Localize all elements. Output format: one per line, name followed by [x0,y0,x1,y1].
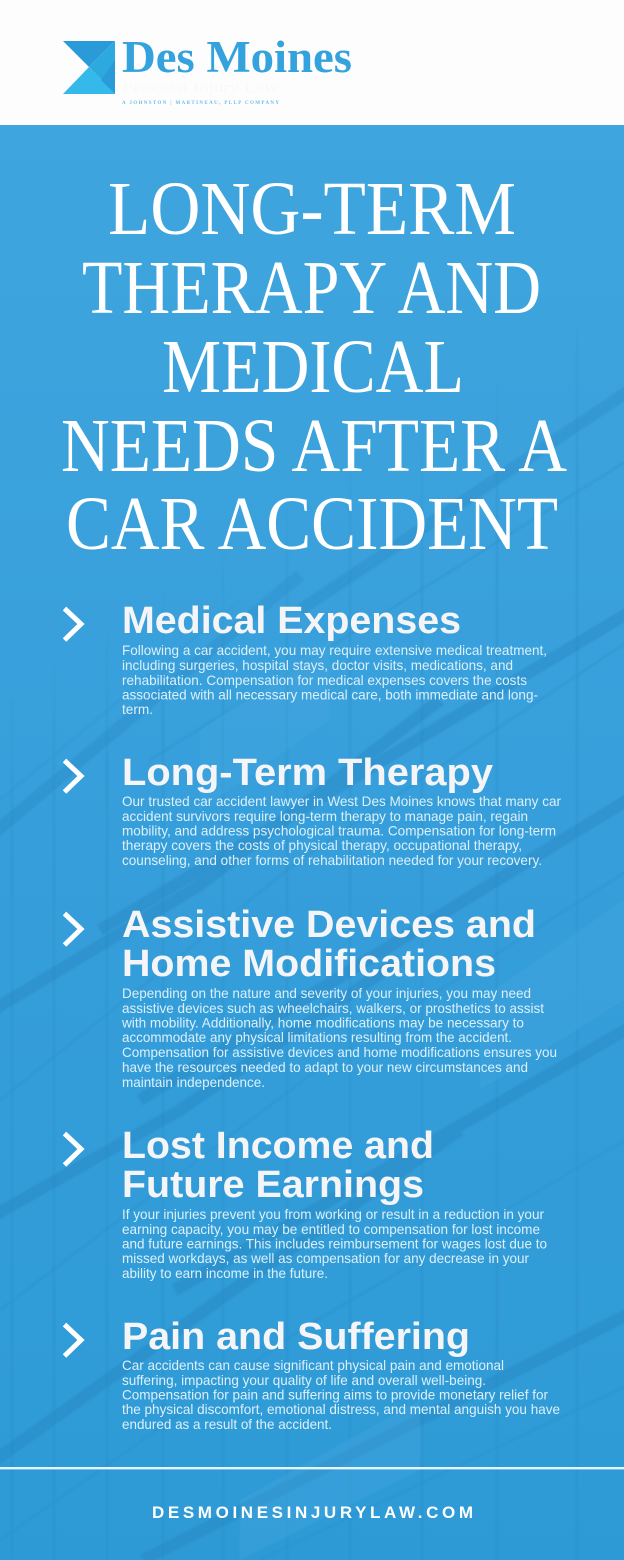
body: assistive devices: have the resources needed to adapt to your new circumstances and [122,1059,528,1075]
heading: assistive devices: Home Modifications [122,943,496,985]
body: assistive devices [121,985,557,1090]
title: CAR ACCIDENT [66,482,558,566]
body: lost income: and future earnings. This includes reimbursement for wages lost due to [122,1236,547,1252]
body: assistive devices: Depending on the nature and severity of your injuries, you may need [122,985,531,1001]
icon: chevron [64,608,81,640]
body: long-term therapy: Our trusted car accident lawyer in West Des Moines knows that many car [122,793,561,809]
heading: lost income: Future Earnings [122,1164,424,1206]
logo wordmark: Des Moines [122,32,352,82]
body: lost income: ability to earn income in the future. [122,1265,328,1281]
icon: chevron [64,760,81,792]
logo faint subtitle: Personal Injury Law [122,80,278,96]
body: medical expenses: including surgeries, hospital stays, doctor visits, medications, and [122,657,513,673]
icon: chevron [64,1324,81,1356]
body: medical expenses [122,642,547,717]
body: medical expenses: rehabilitation. Compensation for medical expenses covers the costs [122,672,527,688]
title: LONG-TERM [108,167,516,251]
body: pain and suffering: the physical discomfort, emotional distress, and mental anguish you have [122,1401,560,1417]
icon: chevron [64,914,81,945]
heading: assistive devices [122,904,536,985]
body: assistive devices: accommodate any physical limitations resulting from the accident. [122,1029,512,1045]
heading: lost income [122,1125,434,1206]
body: assistive devices: Compensation for assistive devices and home modifications ensures you [122,1044,557,1060]
heading: lost income: Lost Income and [122,1125,434,1167]
title [61,167,567,566]
body: medical expenses: associated with all necessary medical care, both immediate and long- [122,686,538,702]
body: assistive devices: maintain independence. [122,1074,265,1090]
heading: medical expenses: Medical Expenses [122,600,461,642]
heading: pain and suffering: Pain and Suffering [122,1316,470,1358]
section: assistive devices [64,904,557,1090]
footer url: DESMOINESINJURYLAW.COM [152,1503,473,1522]
body: long-term therapy: therapy covers the costs of physical therapy, occupational therapy, [122,837,522,853]
body: long-term therapy: accident survivors require long-term therapy to manage pain, regain [122,808,528,824]
title: NEEDS AFTER A [61,404,567,488]
body: long-term therapy [122,793,561,868]
title: MEDICAL [162,325,464,409]
body: long-term therapy: counseling, and other forms of rehabilitation needed for your recovery. [122,852,542,868]
body: lost income: earning capacity, you may be entitled to compensation for lost income [122,1221,540,1237]
body: pain and suffering: endured as a result of the accident. [122,1416,332,1432]
title: THERAPY AND [82,246,541,330]
logo [63,32,352,106]
section: medical expenses [64,600,547,717]
header band [0,0,624,125]
body: long-term therapy: mobility, and address psychological trauma. Compensation for long-term [122,822,556,838]
section: lost income [64,1125,547,1281]
heading: assistive devices: Assistive Devices and [122,904,536,946]
logo tagline: A JOHNSTON | MARTINEAU, PLLP COMPANY [122,101,279,106]
body: lost income: If your injuries prevent you from working or result in a reduction in your [122,1206,544,1222]
body: pain and suffering [122,1357,560,1432]
body: pain and suffering: Car accidents can cause significant physical pain and emotional [122,1357,504,1373]
body: pain and suffering: suffering, impacting your quality of life and overall well-being. [122,1372,486,1388]
body: medical expenses: term. [122,701,153,717]
body: lost income [122,1206,547,1281]
section: long-term therapy [64,752,561,868]
body: assistive devices: with mobility. Additionally, home modifications may be necessary to [121,1014,524,1030]
heading: long-term therapy: Long-Term Therapy [122,752,493,794]
body: pain and suffering: Compensation for pain and suffering aims to provide monetary relief for [122,1386,548,1402]
icon: chevron [64,1134,81,1165]
section: pain and suffering [64,1316,560,1432]
body: medical expenses: Following a car accident, you may require extensive medical treatment, [122,642,547,658]
body: lost income: missed workdays, as well as compensation for any decrease in your [122,1250,529,1266]
body: assistive devices: assistive devices such as wheelchairs, walkers, or prosthetics to assist [122,1000,544,1016]
icon: logo mark [63,41,115,94]
